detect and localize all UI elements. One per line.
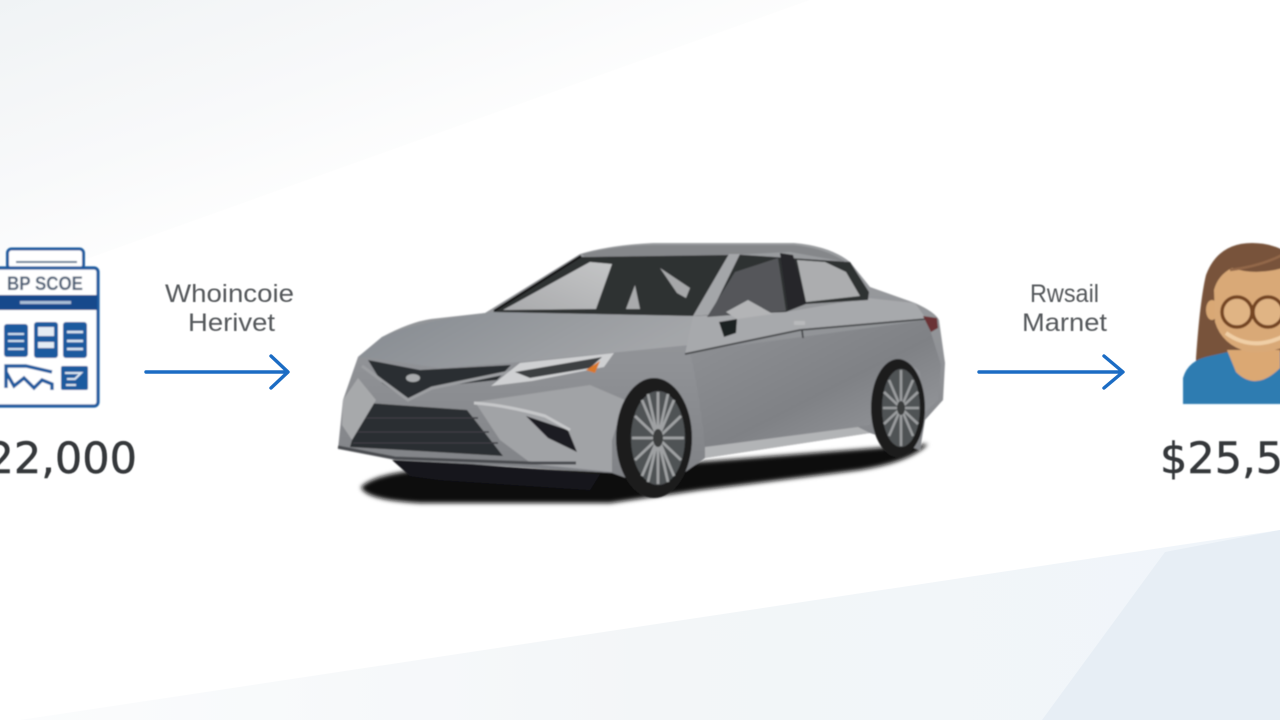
illustration: grey sedan bbox=[338, 243, 945, 503]
rear rim bbox=[882, 369, 920, 447]
icon: smiling woman with glasses bbox=[1183, 243, 1280, 404]
car windshield passenger gap bbox=[660, 268, 690, 298]
car mirror reflection area bbox=[726, 300, 773, 319]
car crease line bbox=[685, 319, 927, 354]
car windshield glass bbox=[503, 262, 612, 310]
car door handle bbox=[794, 321, 805, 325]
arrow: car to retail bbox=[979, 356, 1123, 388]
car lower grille bbox=[350, 403, 503, 456]
neck bbox=[1227, 350, 1280, 381]
car windshield glass right bbox=[626, 285, 640, 309]
car front bumper bbox=[475, 385, 625, 472]
document card 2 bbox=[34, 322, 58, 358]
car greenhouse dark frame bbox=[493, 254, 869, 316]
label: retail market line 2: Marnet bbox=[1022, 309, 1107, 337]
wholesale market group bbox=[0, 249, 294, 484]
car headlight interior bbox=[515, 357, 602, 378]
document small panel bbox=[61, 366, 88, 390]
car fog intake bbox=[526, 416, 577, 452]
document clip line bbox=[16, 261, 77, 263]
smile bbox=[1226, 333, 1280, 343]
background: bottom light panel bbox=[20, 530, 1280, 720]
car grille slats bbox=[353, 418, 498, 443]
car headlight bbox=[491, 353, 614, 386]
glasses bbox=[1222, 297, 1280, 327]
document heading: BP SCOE bbox=[7, 274, 83, 295]
car B-pillar bbox=[780, 253, 807, 310]
car upper grille bbox=[368, 360, 511, 401]
rear tyre bbox=[871, 359, 925, 457]
ear bbox=[1206, 300, 1218, 320]
arrow: wholesale to car bbox=[146, 356, 288, 388]
label: retail market line 1: Rwsail bbox=[1030, 280, 1099, 308]
car side door panels bbox=[690, 320, 941, 447]
car undertray bbox=[392, 460, 600, 490]
car A-pillar bbox=[693, 254, 740, 316]
car rear side window bbox=[797, 260, 860, 302]
document band caption bbox=[20, 301, 71, 304]
shoulders bbox=[1183, 352, 1280, 404]
car body silhouette bbox=[338, 243, 945, 490]
document band bbox=[0, 295, 97, 310]
car roof line bbox=[582, 245, 846, 262]
document chart bbox=[6, 366, 52, 390]
car rear wheel bbox=[871, 359, 925, 457]
car front side window bbox=[707, 258, 786, 317]
car tail light bbox=[923, 316, 938, 332]
rear hub bbox=[897, 401, 905, 415]
document card 3 bbox=[63, 322, 87, 358]
background: bottom-right blue panel bbox=[1042, 530, 1280, 720]
hair bbox=[1196, 243, 1280, 370]
car windshield edge bbox=[494, 256, 581, 311]
car side mirror bbox=[719, 319, 737, 337]
car front wheel bbox=[616, 378, 692, 498]
car upper shoulder panel bbox=[685, 298, 927, 354]
face bbox=[1214, 262, 1280, 352]
car sill bbox=[705, 427, 870, 458]
car ground shadow bbox=[361, 444, 928, 503]
fringe highlight bbox=[1230, 254, 1280, 270]
front rim bbox=[631, 391, 685, 485]
icon: auction sheet document bbox=[0, 249, 98, 406]
front spokes bbox=[632, 392, 684, 484]
front hub bbox=[653, 429, 663, 447]
car amber signal bbox=[586, 361, 600, 373]
document body bbox=[0, 268, 98, 406]
car badge bbox=[406, 374, 420, 382]
car front lip bbox=[338, 447, 576, 463]
car bumper left highlight bbox=[342, 378, 376, 440]
front tyre bbox=[616, 378, 692, 498]
car door seam bbox=[802, 330, 803, 338]
background: top-left light panel bbox=[0, 0, 810, 290]
document card 1 bbox=[4, 324, 28, 357]
label: wholesale market line 1: Whoincoie bbox=[165, 280, 294, 308]
document clip bbox=[8, 249, 84, 269]
retail market group bbox=[979, 243, 1280, 484]
car bumper crease bbox=[474, 403, 570, 430]
label: wholesale market line 2: Herivet bbox=[188, 309, 275, 337]
car hood bbox=[358, 312, 693, 368]
car chrome V trim bbox=[362, 366, 510, 400]
rear spokes bbox=[883, 370, 919, 446]
